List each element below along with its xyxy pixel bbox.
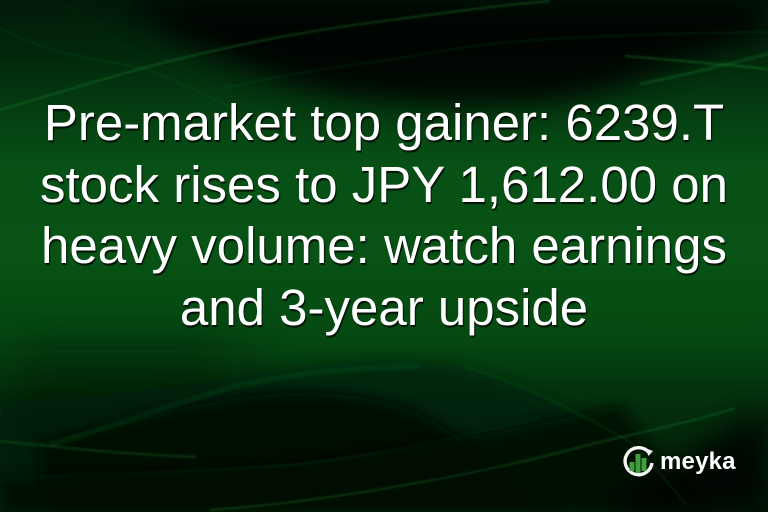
title: Pre-market top gainer: 6239.T (44, 94, 724, 151)
wordmark: meyka (660, 448, 736, 475)
title: and 3-year upside (180, 279, 588, 336)
title: stock rises to JPY 1,612.00 on (40, 156, 728, 213)
logo: meyka (623, 446, 654, 476)
icon: ring with green bars (623, 446, 654, 476)
title (40, 94, 728, 338)
title: heavy volume: watch earnings (41, 217, 727, 274)
